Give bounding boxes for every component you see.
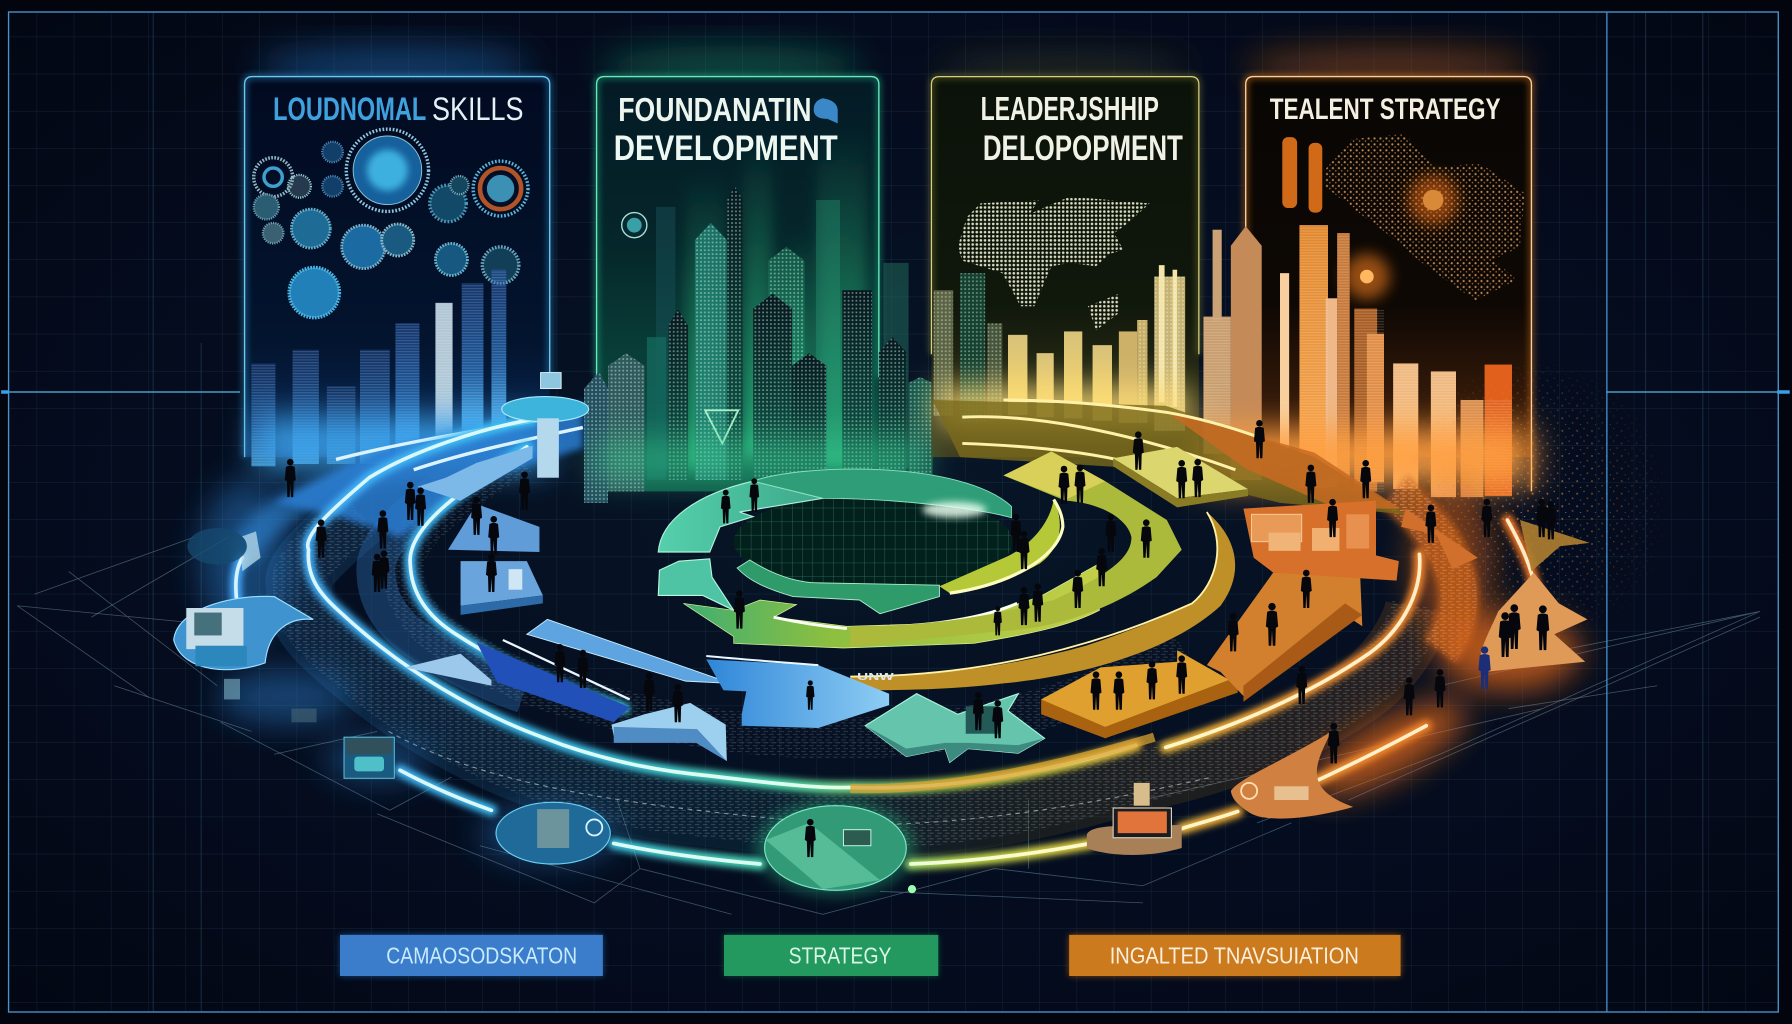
orange ground glow xyxy=(1300,480,1579,813)
floor bands xyxy=(299,454,1459,824)
subheading: Delopopment: DELOPOPMENT xyxy=(983,128,1183,168)
subheading: development: DEVELOPMENT xyxy=(614,128,838,168)
status dot xyxy=(908,885,916,893)
capsule icons xyxy=(1282,137,1322,213)
node: faded left screens xyxy=(187,528,317,722)
button label: STRATEGY xyxy=(789,942,891,968)
tower and platform: upper blue xyxy=(502,373,589,478)
heading: Tealent Strategy: TEALENT STRATEGY xyxy=(1270,93,1501,126)
arrow: right orange fins xyxy=(1401,509,1590,571)
legend button: green xyxy=(724,935,938,976)
lime inner c xyxy=(939,499,1060,593)
lower left block xyxy=(658,559,734,610)
bar chart: orange towers xyxy=(1203,225,1512,497)
node: left laptop xyxy=(174,596,313,670)
green vertical light streaks xyxy=(686,126,867,469)
platform: right orange xyxy=(1480,573,1587,672)
arrow: blue arrow d xyxy=(706,656,889,728)
dark centre xyxy=(734,494,1013,590)
arrow ring outer glow segments xyxy=(236,419,1536,864)
world map xyxy=(958,197,1150,330)
arrow: orange dashboard block xyxy=(1243,501,1399,581)
button label: INGALTED TNAVSUIATION xyxy=(1110,942,1359,968)
center ring: green loop xyxy=(658,469,1099,648)
orange dust xyxy=(1398,365,1667,633)
city towers: green skyline xyxy=(584,186,933,503)
dotted globe cloud xyxy=(1325,134,1525,301)
skyline base glow xyxy=(257,389,1531,486)
lime arc band xyxy=(850,475,1182,647)
button label: CAMAOSODSKATON xyxy=(386,942,577,968)
icon cluster: skill gears xyxy=(254,129,528,318)
panel: Foundanatin Development xyxy=(584,77,933,503)
arrow: left gold block xyxy=(1041,650,1238,738)
legend button: blue xyxy=(340,935,603,976)
node: green bubble xyxy=(765,806,906,890)
blue ground glow xyxy=(200,480,617,862)
bar chart: gold bars xyxy=(934,265,1185,431)
inner low ring xyxy=(737,560,939,614)
icon: target ring xyxy=(622,213,647,238)
upper arcs: yellow and orange floor xyxy=(933,400,1406,514)
arrow: upper blue steps xyxy=(417,446,543,615)
heading: Loudnomal Skills: LOUDNOMAL xyxy=(273,91,426,127)
icon: downward triangle xyxy=(705,410,738,443)
arrow: blue arrow b xyxy=(527,619,731,683)
node: blue device xyxy=(344,737,394,778)
panel glows above headers xyxy=(257,46,1531,87)
legend button: orange xyxy=(1069,935,1401,976)
arrow: blue arrow c xyxy=(611,703,727,761)
green lens flare xyxy=(922,502,986,518)
panel: Loudnomal Skills xyxy=(245,77,550,466)
panel: Tealent Strategy xyxy=(1203,77,1531,497)
upper left arrow arc xyxy=(658,481,823,552)
heading: Loudnomal Skills: SKILLS xyxy=(432,91,523,127)
node: bottom orange callout xyxy=(1231,731,1353,819)
node: orange device xyxy=(1087,783,1182,855)
lower lime band xyxy=(683,563,1099,648)
label glyphs on arrow tip: UNW xyxy=(857,672,894,683)
floor perimeter lines xyxy=(17,537,1760,914)
yellow arrow blocks xyxy=(1003,447,1248,507)
upper left blue arc glow xyxy=(242,440,480,558)
heading: Foundanatin Development: FOUNDANATIN xyxy=(618,92,811,129)
people silhouettes xyxy=(285,420,1556,857)
outer dashed floor ring xyxy=(389,731,1211,825)
green bubble glow xyxy=(755,800,915,896)
upper arcs: blue floor xyxy=(274,402,583,537)
node: blue bubble xyxy=(496,802,610,864)
bar chart: blue skyline xyxy=(251,270,506,466)
top band xyxy=(753,469,1011,518)
arrow: teal arrow xyxy=(865,694,1045,762)
arrow: blue arrow a xyxy=(405,640,630,722)
glow burst: globe node xyxy=(1344,175,1458,299)
panel: Leadership Delopopment xyxy=(931,77,1199,457)
heading: Leadership: LEADERJSHHIP xyxy=(981,91,1159,128)
ring: gold band xyxy=(850,512,1235,789)
arrow: orange walkway xyxy=(1207,571,1362,702)
icon: speech bubble xyxy=(814,98,838,123)
